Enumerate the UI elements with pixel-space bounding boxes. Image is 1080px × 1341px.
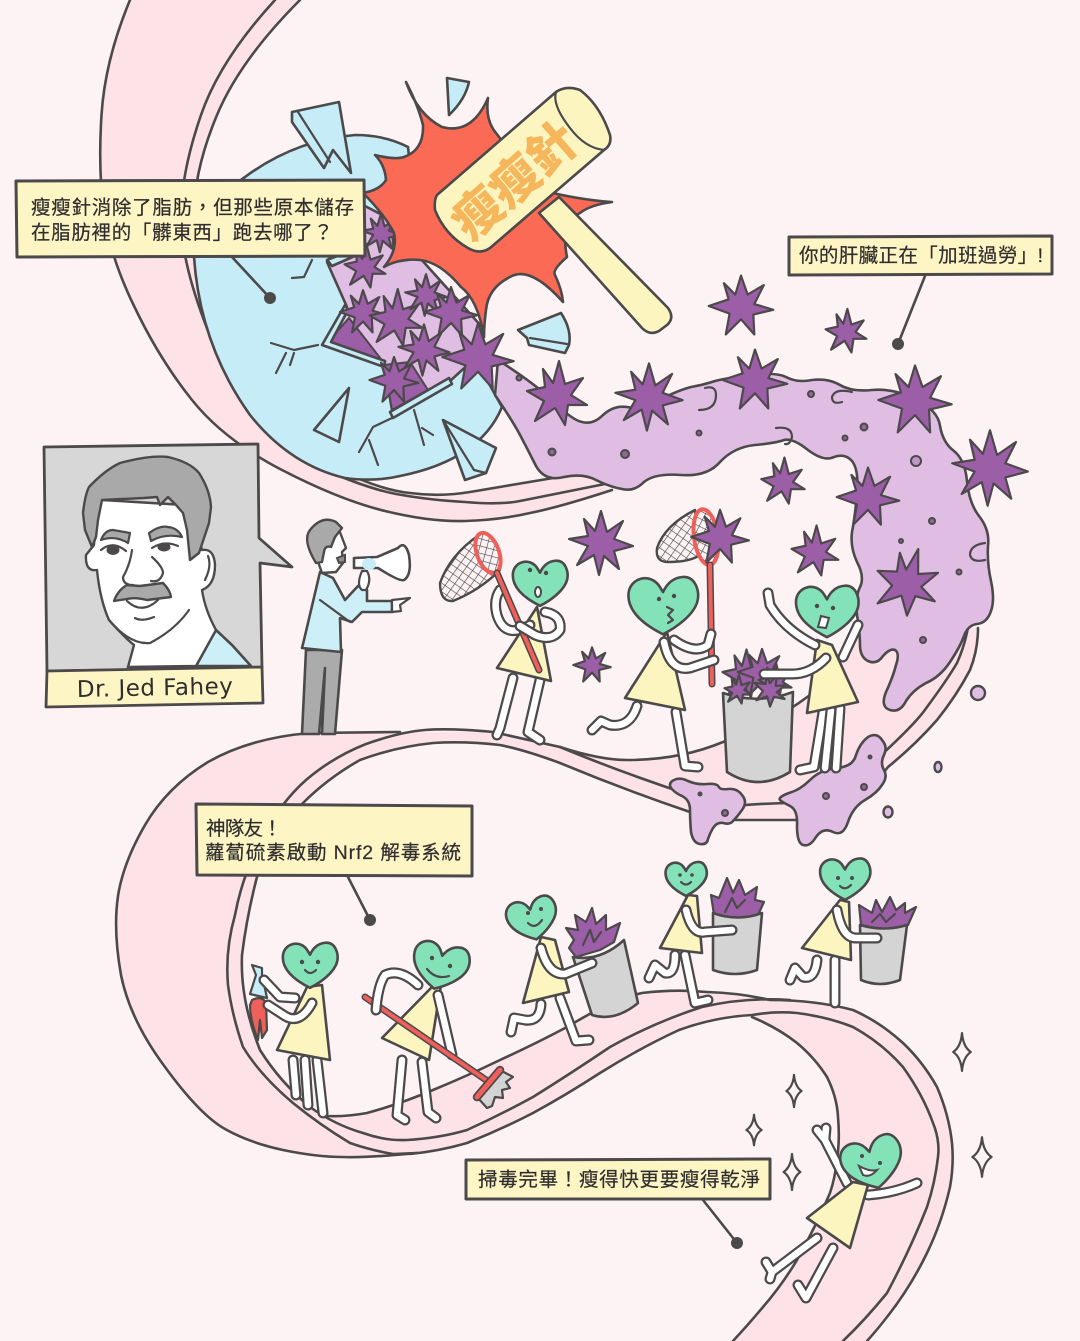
legs [592,706,637,730]
dress [523,937,569,1003]
toxins in can [566,908,620,957]
trash can [713,913,762,974]
dress [807,640,858,713]
front arm [376,973,418,1010]
character: catcher with net [440,530,568,740]
head [513,561,568,606]
toxin pocket inside the crack [322,205,484,418]
spray bottle [250,965,267,998]
toxins in can [859,897,916,930]
arm [541,948,592,974]
head [837,1131,908,1195]
head [666,862,707,896]
callout: liver overtime [789,236,1052,350]
callout: where did the toxins go [16,180,365,304]
trash can filled with toxins [722,649,793,782]
legs [649,955,675,978]
trash can [573,940,638,1017]
callout: where did the toxins go: 瘦瘦針消除了脂肪，但那些原本儲存 [31,197,354,219]
arms [768,593,815,645]
toxins in can [711,878,764,920]
arm [837,910,877,938]
callout: Nrf2 teammate [196,804,472,926]
purple blobs on the ribbon [670,735,886,845]
face [86,500,216,667]
head [407,937,473,995]
arm [686,910,732,932]
legs [397,1060,405,1120]
legs [766,1238,817,1279]
arms [264,980,295,998]
legs [497,678,513,735]
hammer handle [539,197,671,333]
net [657,510,700,562]
ribbon: middle and lower curve [116,620,978,1341]
callout: detox complete [466,1159,770,1249]
dress [807,1182,868,1248]
head [820,858,870,900]
dress [625,632,685,710]
head [628,577,698,634]
character: sweeping with broom [365,937,513,1120]
dress [497,607,551,681]
eyes [106,545,120,555]
back arm [438,995,452,1055]
brows [101,527,182,543]
pointing hand [392,598,410,612]
head [796,586,859,637]
droplets [884,686,985,818]
head [283,943,338,988]
net handle [497,573,539,670]
net [440,535,500,601]
legs [511,1004,541,1032]
hammer head [435,88,610,252]
shirt [302,572,392,652]
dress [802,900,851,960]
sparkles [746,1033,992,1190]
fat cell: cracked blue sphere [194,135,502,480]
shirt [128,630,251,667]
callout: detox complete: 掃毒完畢！瘦得快更要瘦得乾淨 [478,1169,760,1191]
character: pointing [764,586,859,770]
flying toxin stars [442,276,1028,682]
hammer label: 瘦瘦針 [442,113,589,251]
legs [790,960,817,980]
megaphone [354,545,410,580]
face [316,526,346,573]
purple toxic flow [495,360,993,845]
crack lines [271,260,433,465]
hammer labelled 瘦瘦針 [435,88,671,333]
broom bristles [477,1070,513,1108]
trousers [302,650,342,734]
legs [293,1060,296,1095]
dress [660,895,702,953]
portrait: Dr. Jed Fahey [44,444,292,707]
hair [83,457,211,560]
front arm [520,612,560,638]
back arm [496,590,530,631]
rag [250,998,267,1040]
name caption: Dr. Jed Fahey [77,674,233,703]
character: cleaning with spray and rag [250,943,338,1113]
hair [307,520,342,563]
callout: where did the toxins go: 在脂肪裡的「髒東西」跑去哪了？ [31,222,333,244]
red impact burst [363,82,612,337]
net handle [710,565,712,684]
arms [674,634,711,649]
legs [800,712,823,770]
character: catcher kissing with raised net [592,508,749,767]
trash can [860,925,907,984]
portrait frame with speech tail [44,444,292,671]
callout: liver overtime: 你的肝臟正在「加班過勞」! [799,245,1043,267]
head [504,894,561,945]
dress [382,985,441,1060]
broom handle [365,997,489,1082]
ribbon: top curve [100,0,612,521]
character: carrying tilted trash can [504,894,638,1041]
moustache [114,583,171,601]
toxins in the fat [340,214,478,402]
character: happy sliding [766,1128,917,1298]
man with megaphone [302,520,410,734]
dress [277,985,330,1060]
callout: Nrf2 teammate: 蘿蔔硫素啟動 Nrf2 解毒系統 [205,842,461,864]
callout: Nrf2 teammate: 神隊友！ [206,818,282,840]
glass shards [292,78,570,480]
arms [817,1128,847,1183]
character: carrying trash can [649,862,764,1003]
character: carrying trash can at the top of the curve [790,858,916,1003]
name caption [46,667,263,707]
